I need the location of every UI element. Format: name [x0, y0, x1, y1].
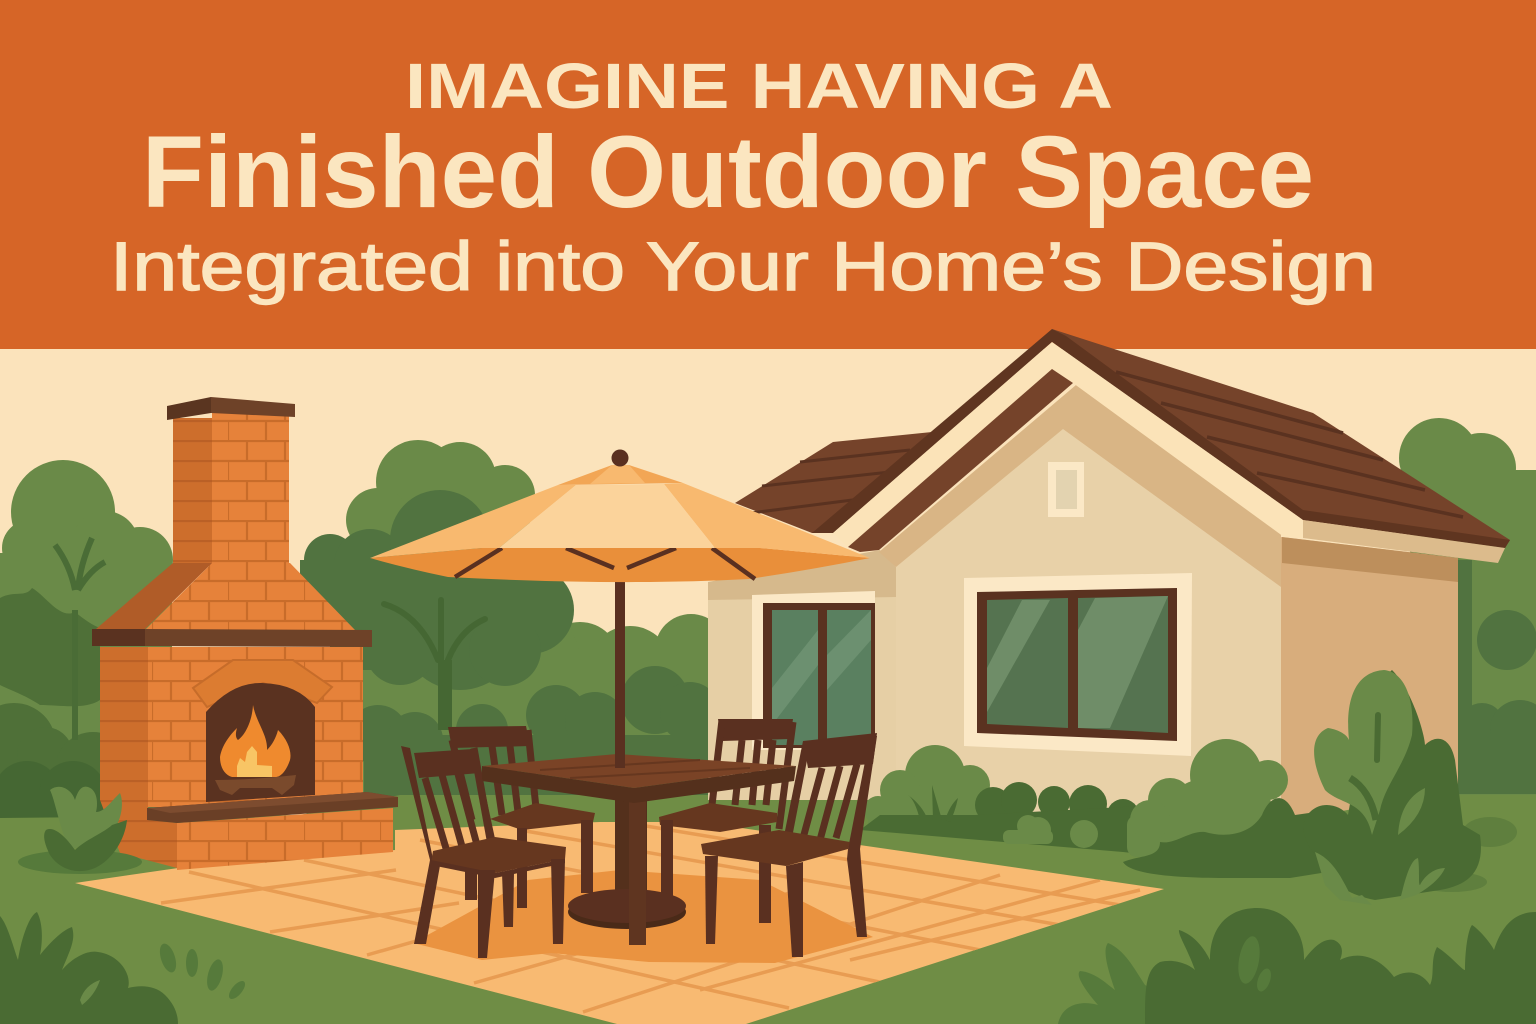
right roof plane	[1052, 329, 1510, 548]
title line 1: IMAGINE HAVING A	[405, 50, 1113, 122]
back right chair	[659, 719, 793, 923]
right wall eave shadow	[1282, 537, 1458, 582]
back roof	[735, 432, 932, 533]
canopy right panel	[664, 483, 870, 558]
canopy centre panel	[499, 484, 715, 548]
arch surround	[193, 660, 332, 707]
small shrub by fireplace	[18, 787, 142, 874]
umbrella pole	[615, 545, 625, 768]
title line 3: Integrated into Your Home’s Design	[110, 228, 1376, 305]
background tree behind umbrella	[300, 440, 727, 810]
title line 2: Finished Outdoor Space	[142, 115, 1314, 229]
fire opening	[206, 683, 315, 802]
foreground shrub right	[1058, 908, 1536, 1024]
logs	[215, 775, 296, 795]
patio	[75, 822, 1164, 1024]
tall shrub	[1303, 670, 1517, 905]
firebox body	[100, 647, 363, 868]
gable inner roof trim	[848, 369, 1073, 552]
front left chair	[401, 746, 566, 958]
left wing wall	[708, 567, 896, 800]
front window	[964, 573, 1192, 756]
sky background	[0, 340, 1536, 1024]
hearth base	[177, 808, 393, 870]
house	[708, 329, 1510, 822]
foreground shrub left	[0, 912, 248, 1024]
foundation shrubs	[860, 670, 1517, 905]
sliding door	[752, 591, 875, 750]
finial	[612, 450, 628, 466]
background trees right	[1399, 418, 1536, 800]
chimney	[167, 397, 295, 566]
left dark roof edge	[812, 329, 1052, 533]
header band	[0, 0, 1536, 349]
left light shrub	[864, 745, 990, 828]
tabletop	[482, 766, 796, 803]
front right chair	[701, 733, 877, 957]
back left chair	[448, 726, 595, 908]
fireplace	[92, 397, 398, 870]
gable vent	[1048, 462, 1084, 517]
soffit under eave	[1303, 520, 1505, 563]
patio table	[482, 545, 796, 945]
canopy underside	[370, 548, 870, 582]
canopy top cap	[558, 465, 683, 485]
right side wall	[1281, 537, 1458, 822]
dark hedge	[860, 782, 1160, 856]
grass lawn	[0, 795, 1536, 1024]
pedestal and base	[568, 795, 686, 945]
gable fascia cream	[833, 342, 1303, 548]
table shadow	[413, 870, 873, 963]
background trees left	[0, 460, 173, 829]
left wing eave band	[708, 550, 896, 600]
middle bush shadow	[1123, 798, 1340, 878]
small leaves	[157, 942, 248, 1002]
hedge small highlights	[1003, 815, 1098, 848]
canopy left panel	[370, 485, 576, 558]
umbrella	[370, 450, 870, 582]
paving joints	[161, 825, 1140, 1012]
hood	[96, 563, 355, 630]
canopy ribs	[455, 548, 755, 579]
flame	[220, 705, 290, 777]
hearth shelf	[147, 792, 398, 823]
middle bush	[1127, 739, 1288, 857]
gable wall shading	[879, 385, 1281, 822]
gable wall light panel	[896, 429, 1281, 822]
mantel	[92, 629, 372, 647]
